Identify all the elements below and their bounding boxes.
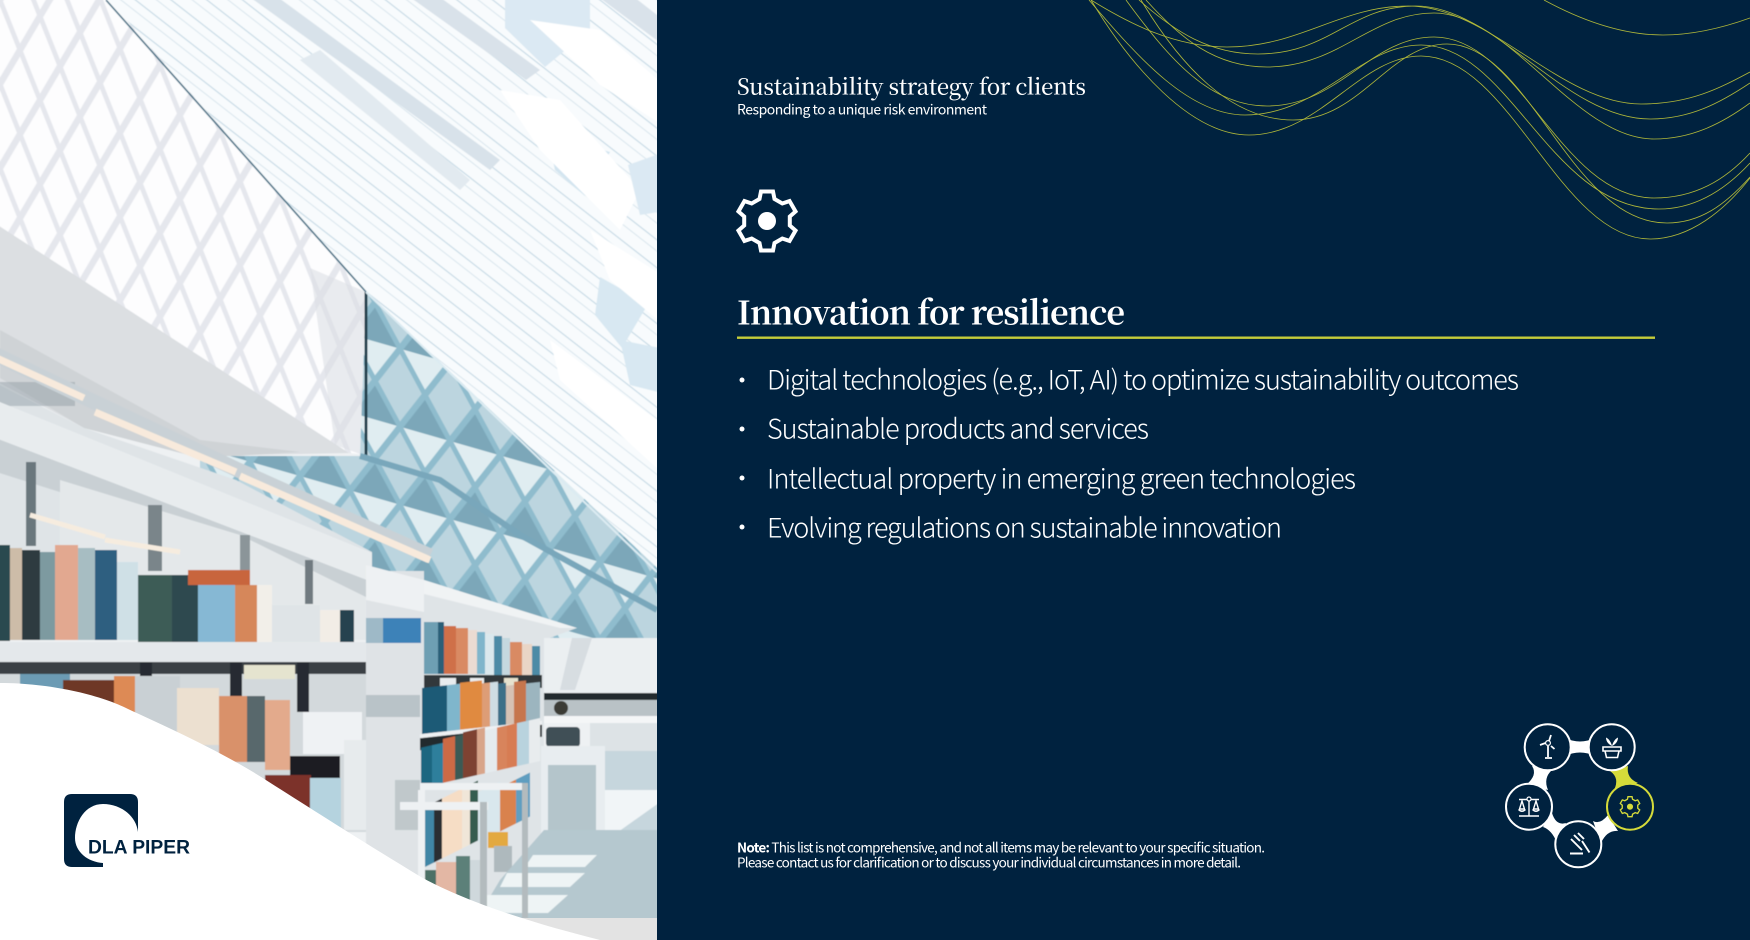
icon: wind turbine xyxy=(1525,724,1571,770)
ceiling lights xyxy=(0,352,430,556)
subtitle: Responding to a unique risk environment xyxy=(737,100,988,120)
decorative wave lines xyxy=(1089,0,1750,239)
icon: gear xyxy=(738,192,796,250)
lattice wall xyxy=(0,0,366,454)
lattice window xyxy=(200,292,670,638)
logo: DLA Piper: DLA PIPER xyxy=(88,838,190,858)
bullet list: Digital technologies (e.g., IoT, AI) to optimize sustainability outcomes xyxy=(767,358,1519,398)
railings xyxy=(420,783,528,790)
tall shelf panel xyxy=(366,571,424,891)
panel: library photograph xyxy=(0,0,670,930)
footnote xyxy=(737,836,1265,872)
logo: DLA Piper xyxy=(64,794,190,867)
navy background panel xyxy=(657,0,1750,940)
bullet list: Sustainable products and services xyxy=(767,408,1149,446)
lower-left book row xyxy=(0,662,366,838)
grey base band xyxy=(500,918,657,940)
soffit xyxy=(0,220,349,456)
back of shelves area xyxy=(0,386,372,554)
white curved logo area xyxy=(0,683,600,940)
upper-left book row xyxy=(0,544,355,643)
footnote: Please contact us for clarification or to discuss your individual circumstances in more detail. xyxy=(737,852,1241,872)
right shelf books xyxy=(424,622,542,688)
icon cluster: five connected topics xyxy=(1506,724,1653,867)
bullet list: Evolving regulations on sustainable innovation xyxy=(767,506,1282,546)
bullet list xyxy=(740,358,1519,546)
ceiling xyxy=(100,0,670,590)
footnote: Note: This list is not comprehensive, and not all items may be relevant to your specific situation. xyxy=(737,836,1265,856)
person xyxy=(546,701,580,747)
reading pedestal and wall xyxy=(604,750,657,830)
floor xyxy=(491,830,657,918)
back room xyxy=(544,638,546,639)
icon: gavel xyxy=(1555,821,1601,867)
right shelf bay xyxy=(424,580,577,910)
icon: plant pot xyxy=(1589,724,1635,770)
bullet list: Intellectual property in emerging green technologies xyxy=(767,458,1356,496)
icon: gear highlighted xyxy=(1607,784,1653,830)
heading rule xyxy=(737,336,1655,339)
title: Sustainability strategy for clients xyxy=(737,70,1086,102)
icon: scales xyxy=(1506,784,1552,830)
heading: Innovation for resilience xyxy=(737,288,1125,334)
